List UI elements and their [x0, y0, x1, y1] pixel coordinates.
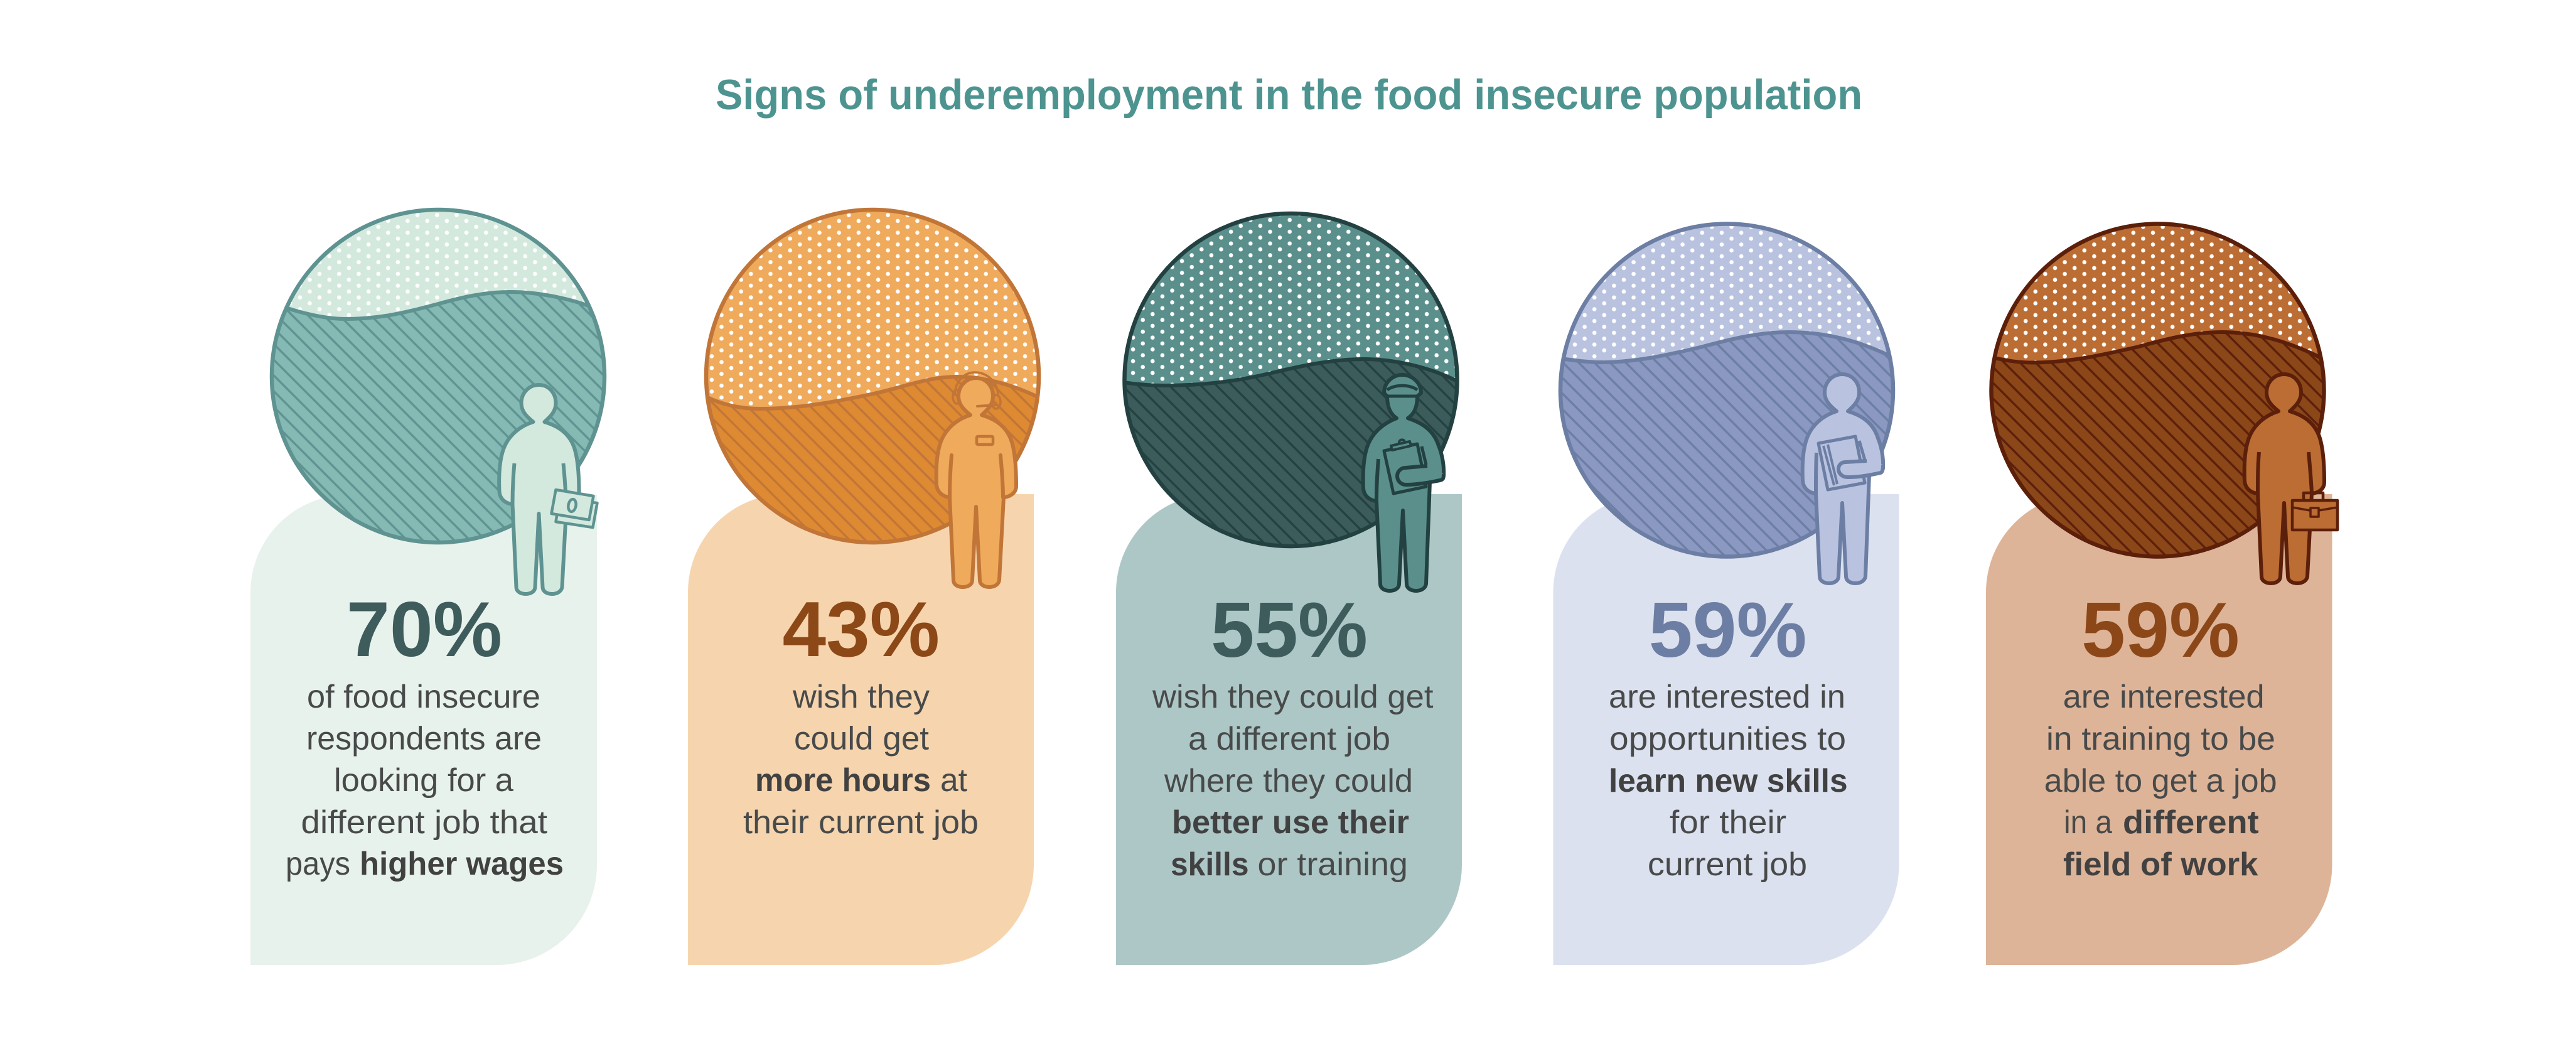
description: could get	[794, 721, 930, 757]
panel: higher wages 70%	[250, 210, 626, 965]
percentage: 43%	[782, 586, 940, 673]
description: or training	[1258, 846, 1408, 883]
wave circle	[270, 207, 606, 545]
description: current job	[1648, 846, 1807, 883]
card background	[250, 495, 597, 965]
description: looking for a	[334, 762, 513, 799]
description	[2044, 679, 2277, 883]
card background	[1553, 494, 1899, 965]
icon: person holding money	[499, 385, 598, 594]
description: in a	[2064, 804, 2112, 841]
description	[1152, 679, 1434, 883]
description: skills	[1171, 846, 1249, 883]
percentage: 70%	[346, 586, 502, 673]
description: wish they	[792, 679, 930, 715]
percentage: 59%	[1649, 587, 1807, 674]
card background	[688, 494, 1034, 965]
wave circle	[1122, 211, 1459, 549]
icon: person with headset	[936, 372, 1016, 587]
icon: person in cap with clipboard	[1363, 375, 1444, 591]
description: learn new skills	[1609, 763, 1848, 799]
description: are interested in	[1609, 679, 1845, 715]
panel: more hours 43%	[688, 207, 1041, 965]
icon: person holding book	[1803, 374, 1883, 583]
description: different job that	[301, 804, 548, 841]
description: their current job	[743, 804, 979, 841]
description: of food insecure	[307, 679, 540, 715]
wave circle	[1989, 222, 2326, 559]
panel: better use skills 55%	[1116, 211, 1462, 965]
description: for their	[1670, 804, 1786, 841]
card background	[1986, 494, 2332, 965]
description	[1609, 679, 1848, 883]
description: wish they could get	[1152, 679, 1434, 715]
percentage: 55%	[1211, 587, 1368, 674]
description: are interested	[2063, 679, 2265, 715]
wave circle	[1558, 222, 1896, 559]
description: opportunities to	[1609, 721, 1846, 757]
description: in training to be	[2046, 721, 2275, 757]
icon: person with briefcase	[2245, 374, 2337, 583]
title: Signs of underemployment in the food insecure population	[716, 71, 1862, 119]
description: pays	[286, 846, 350, 882]
description: a different job	[1188, 721, 1390, 757]
description: higher wages	[360, 846, 564, 882]
description: respondents are	[306, 721, 542, 757]
wave circle	[704, 207, 1041, 545]
description: field of work	[2063, 846, 2258, 883]
description	[743, 679, 979, 841]
description: able to get a job	[2044, 763, 2277, 799]
description: better use their	[1172, 804, 1409, 841]
description: different	[2123, 804, 2259, 841]
panel: learn new skills 59%	[1553, 222, 1899, 965]
description: at	[940, 762, 968, 799]
description	[286, 679, 564, 882]
percentage: 59%	[2081, 587, 2240, 674]
description: where they could	[1164, 763, 1413, 799]
description: more hours	[755, 762, 931, 799]
card background	[1116, 494, 1462, 965]
panel: different field 59%	[1986, 222, 2339, 965]
